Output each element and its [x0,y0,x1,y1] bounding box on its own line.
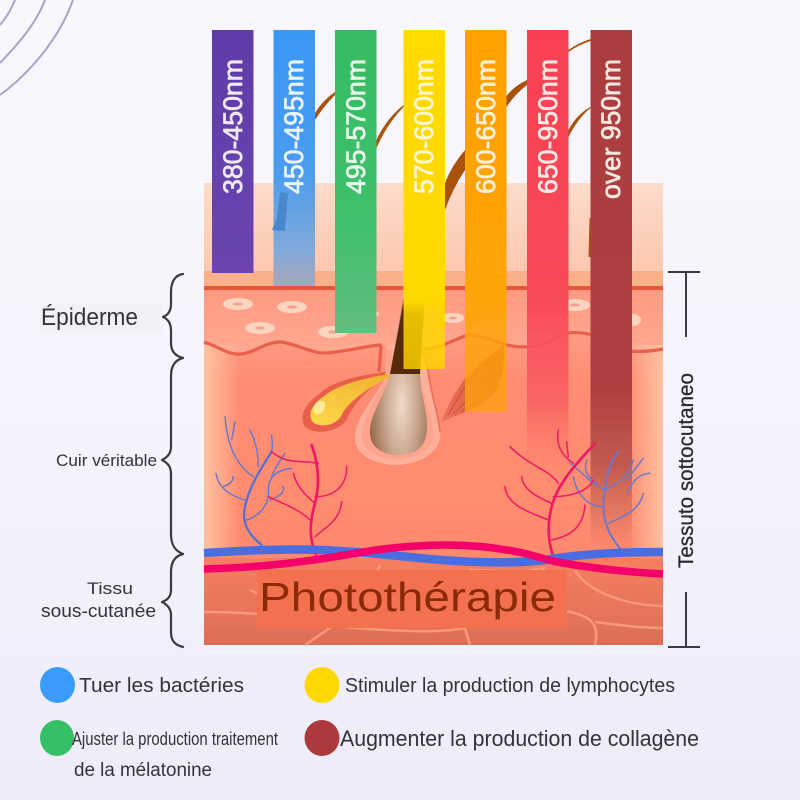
sebaceous gland [302,372,389,432]
capillaries [216,417,650,557]
legend: kill bacteria: Tuer les bactéries [79,675,244,697]
scale marker: Tessuto sottocutaneo [668,272,700,647]
light bar: over 950nm maroon: over 950nm [596,59,626,199]
light bar: over 950nm maroon [590,30,632,545]
arrector pili muscle [442,345,504,422]
scale marker: Tessuto sottocutaneo: Tessuto sottocutaneo [675,373,698,568]
light bar: 600-650nm orange: 600-650nm [471,59,501,194]
legend: stimulate lymphocytes [304,667,675,703]
light bar: 650-950nm red [527,30,568,465]
legend: stimulate lymphocytes: Stimuler la production de lymphocytes [345,675,675,697]
main blood vessels [204,545,663,574]
epidermis boundary line [204,332,663,372]
light bar: 495-570nm green: 495-570nm [341,59,371,194]
label: Tissu sous-cutanée [41,579,156,621]
label: Tissu sous-cutanée: sous-cutanée [41,601,156,621]
label: Cuir véritable: Cuir véritable [56,451,157,470]
light bar: 380-450nm purple: 380-450nm [218,59,248,194]
hair root and bulb [370,205,445,455]
light bar: 450-495nm blue [272,30,315,286]
legend: melatonin [40,720,278,781]
light bar: 450-495nm blue: 450-495nm [279,59,309,194]
hair strands [315,39,590,257]
legend: collagen: Augmenter la production de collagène [340,726,699,751]
subcutaneous fat cells [204,565,663,645]
panel: skin layers [204,183,663,645]
light bar: 495-570nm green [335,30,376,333]
light bar: 380-450nm purple [212,30,254,273]
label: Épiderme: Épiderme [41,304,138,331]
label: Tissu sous-cutanée: Tissu [87,579,133,598]
braces for skin layers [162,274,183,647]
heading: Photothérapie: Photothérapie [259,574,556,620]
decorative arcs [0,0,73,95]
heading: Photothérapie [257,570,567,628]
light bar: 570-600nm yellow [404,30,445,369]
legend: kill bacteria [40,667,244,703]
light bar: 600-650nm orange [465,30,506,412]
hair follicle sheath [355,345,440,465]
legend: collagen [304,720,699,756]
epidermis cells [223,298,641,338]
legend: melatonin: de la mélatonine [74,760,212,781]
light bar: 650-950nm red: 650-950nm [533,59,563,194]
light bar: 570-600nm yellow: 570-600nm [409,59,439,194]
legend: melatonin: Ajuster la production traitement [72,729,278,749]
